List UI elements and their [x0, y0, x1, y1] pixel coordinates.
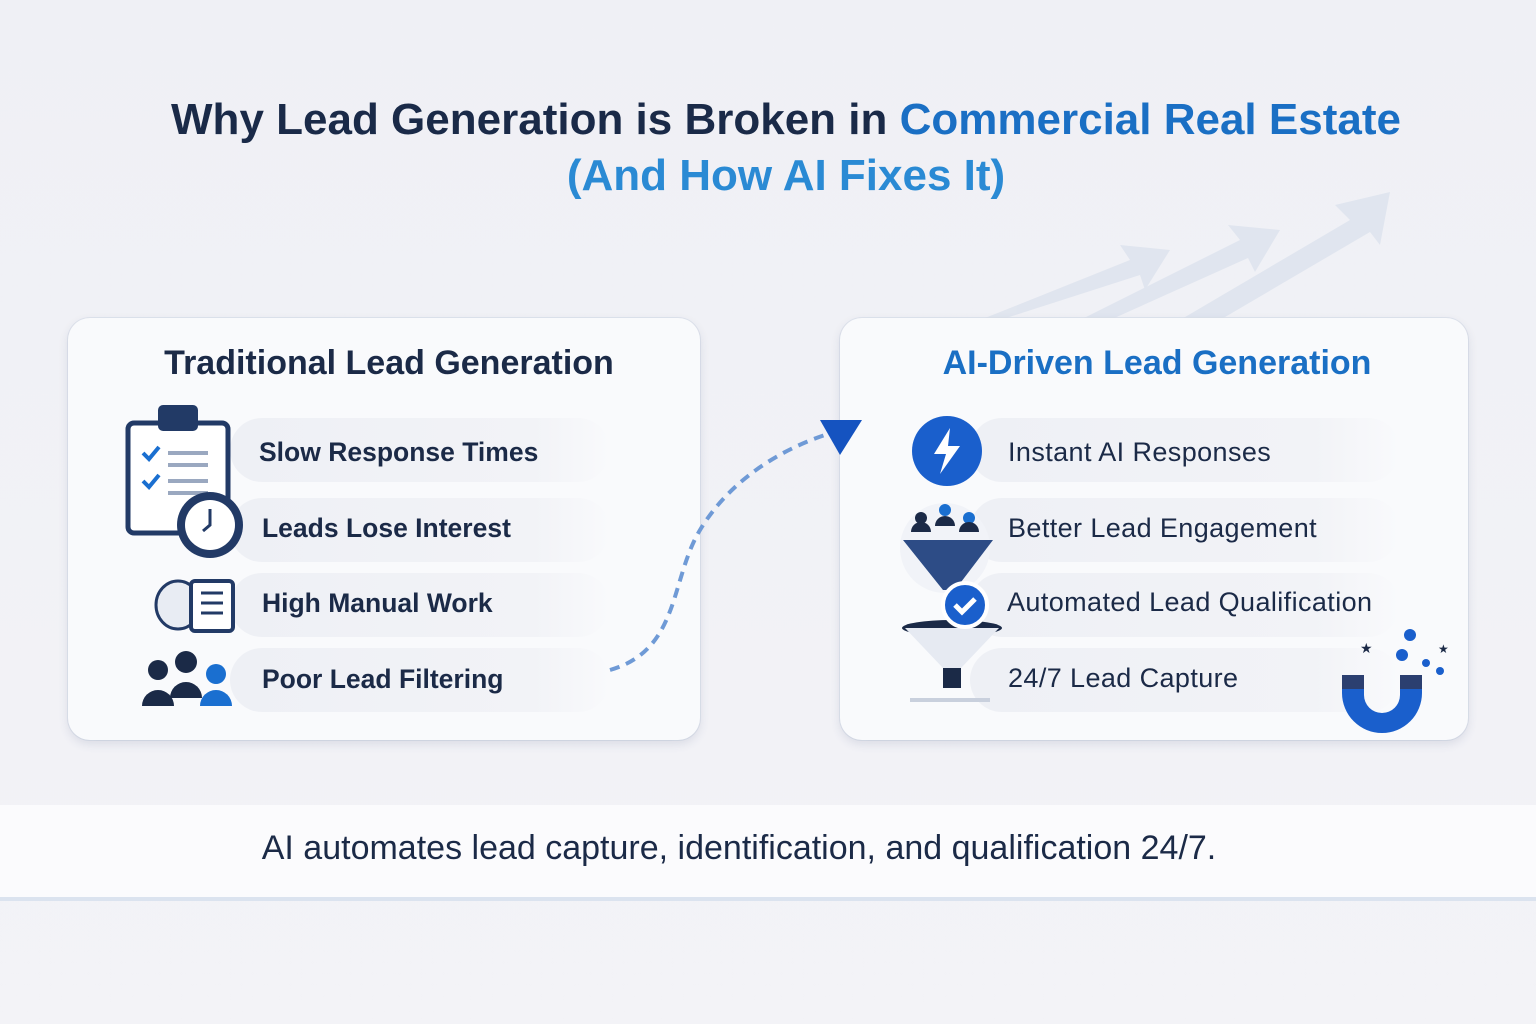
item: leads lose interest: Leads Lose Interest	[262, 513, 511, 543]
panel: traditional	[68, 318, 700, 740]
icon: brain document	[154, 579, 235, 633]
icon: magnet	[1342, 629, 1449, 733]
heading: AI: AI-Driven Lead Generation	[943, 344, 1371, 382]
icon: magnet: ★	[1438, 642, 1449, 656]
icon: lightning	[912, 416, 982, 486]
footer band	[0, 805, 1536, 901]
arrow: dashed curve	[610, 420, 862, 672]
item: slow response: Slow Response Times	[259, 437, 538, 467]
decorative arrows background	[988, 192, 1390, 317]
panel: AI-driven	[840, 318, 1468, 740]
title: Why Lead Generation is Broken in Commercial Real Estate	[171, 95, 1401, 144]
title	[171, 95, 1401, 200]
item: manual work: High Manual Work	[262, 588, 493, 618]
item: poor filtering: Poor Lead Filtering	[262, 664, 503, 694]
item: capture: 24/7 Lead Capture	[1008, 663, 1238, 693]
item: engagement: Better Lead Engagement	[1008, 513, 1317, 543]
icon: magnet: ★	[1360, 640, 1373, 656]
icon: clipboard clock	[126, 405, 243, 558]
item: qualification: Automated Lead Qualification	[1007, 587, 1372, 617]
footer text: AI automates lead capture, identification, and qualification 24/7.	[262, 829, 1216, 867]
item: instant responses: Instant AI Responses	[1008, 437, 1271, 467]
icon: people	[142, 651, 232, 706]
heading: traditional: Traditional Lead Generation	[164, 344, 614, 382]
icon: funnel	[902, 504, 1002, 702]
title: (And How AI Fixes It)	[567, 151, 1005, 200]
